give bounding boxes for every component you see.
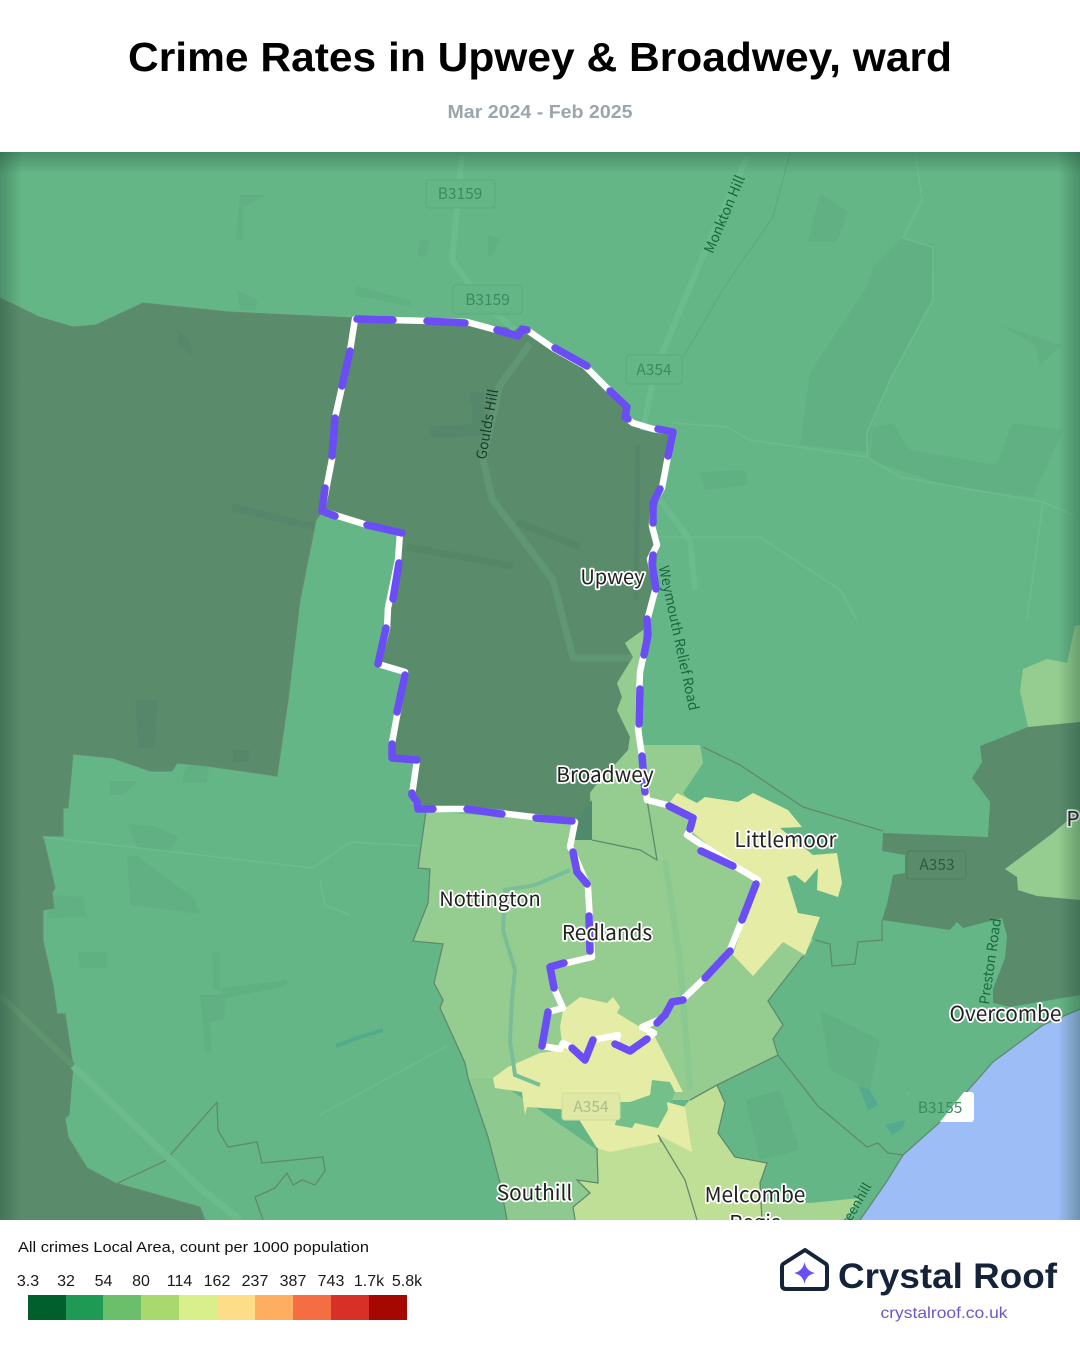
south-west green zone <box>468 1078 598 1220</box>
right light patch <box>1005 815 1080 900</box>
road shield: A354 north: A354 <box>636 358 672 380</box>
road label: Preston Road: Preston Road <box>974 917 1006 1006</box>
yellow zone: south of Redlands <box>493 997 692 1152</box>
road shield: A354 south <box>562 1093 620 1120</box>
legend tick values: 1.7k <box>354 1273 385 1290</box>
legend tick values <box>17 1273 423 1290</box>
road label: Monkton Hill: Monkton Hill <box>699 172 750 256</box>
coastal line and ward boundaries <box>118 747 1080 1220</box>
zone outlines <box>0 298 355 1220</box>
road shield: A354 south: A354 <box>573 1095 609 1117</box>
right dark zone: Preston <box>882 722 1080 1007</box>
south tip pale zone <box>760 1198 860 1220</box>
place label: Overcombe: Overcombe <box>950 997 1061 1027</box>
water: river and ponds <box>503 870 570 1085</box>
forest patches on base area <box>47 193 1063 1160</box>
roads <box>70 327 658 1160</box>
dark stream notch by ward corner <box>575 800 592 840</box>
dark zone patches <box>135 330 314 762</box>
road shield: B3159 south <box>453 285 522 314</box>
legend tick values: 5.8k <box>392 1273 423 1290</box>
place label: clipped edge label: P <box>1066 802 1080 832</box>
subtitle: date range: Mar 2024 - Feb 2025 <box>448 102 632 122</box>
legend tick values: 162 <box>204 1273 230 1290</box>
place label: Littlemoor: Littlemoor <box>734 823 838 853</box>
ward terrain details <box>480 342 632 662</box>
place label: Southill: Southill <box>497 1176 572 1206</box>
website url: crystalroof.co.uk <box>880 1305 1009 1322</box>
dark zone: Upwey and Broadwey ward <box>322 319 673 840</box>
legend tick values: 387 <box>280 1273 306 1290</box>
road shield: B3155: B3155 <box>918 1096 962 1118</box>
road shield: A354 north <box>626 355 682 384</box>
road shield: B3159 north: B3159 <box>438 182 482 204</box>
legend tick values: 114 <box>167 1273 192 1290</box>
logo wordmark: Crystal Roof <box>838 1257 1057 1296</box>
road shield: A353 <box>907 851 966 879</box>
map base area <box>0 152 1080 1220</box>
dark zone: western low crime area <box>0 298 355 1220</box>
road label: Weymouth Relief Road: Weymouth Relief Road <box>654 564 704 712</box>
logo: Crystal Roof <box>782 1250 1057 1322</box>
legend title: All crimes Local Area, count per 1000 population <box>18 1239 369 1256</box>
place label: Nottington: Nottington <box>439 883 541 912</box>
south central pale zone: Southill and Melcombe <box>573 1085 767 1220</box>
icon: house with star <box>782 1250 827 1289</box>
boundary purple dashes <box>322 319 756 1060</box>
road shield: A353: A353 <box>919 853 955 875</box>
ward boundary <box>322 319 758 1060</box>
legend colour scale <box>28 1295 407 1320</box>
map edge vignette <box>0 152 1080 1220</box>
green pocket behind south yellow zone <box>615 1080 675 1128</box>
place label: Regis: Regis <box>729 1206 781 1236</box>
place label: Melcombe: Melcombe <box>705 1178 805 1208</box>
place label: Upwey: Upwey <box>580 561 645 590</box>
road shield: B3159 north <box>426 180 495 208</box>
place label: Broadwey: Broadwey <box>556 758 654 788</box>
legend <box>17 1239 423 1320</box>
legend tick values: 743 <box>318 1273 344 1290</box>
legend tick values: 237 <box>242 1273 268 1290</box>
boundary white line <box>322 319 758 1060</box>
legend tick values: 3.3 <box>17 1273 39 1290</box>
title: Crime Rates in Upwey & Broadwey, ward <box>128 34 952 80</box>
road label: Greenhill: Greenhill <box>831 1178 875 1236</box>
legend tick values: 54 <box>95 1273 112 1290</box>
road shield: B3159 south: B3159 <box>465 288 510 310</box>
place label: Redlands: Redlands <box>562 916 652 946</box>
road shield: B3155 <box>907 1092 974 1122</box>
right light zones <box>1020 625 1080 727</box>
light green zones: Nottington and Redlands <box>413 630 813 1100</box>
yellow zone: Littlemoor <box>670 793 842 976</box>
road label: Goulds Hill: Goulds Hill <box>471 387 503 461</box>
legend tick values: 80 <box>132 1273 150 1290</box>
sea <box>860 1009 1080 1220</box>
legend tick values: 32 <box>57 1273 75 1290</box>
